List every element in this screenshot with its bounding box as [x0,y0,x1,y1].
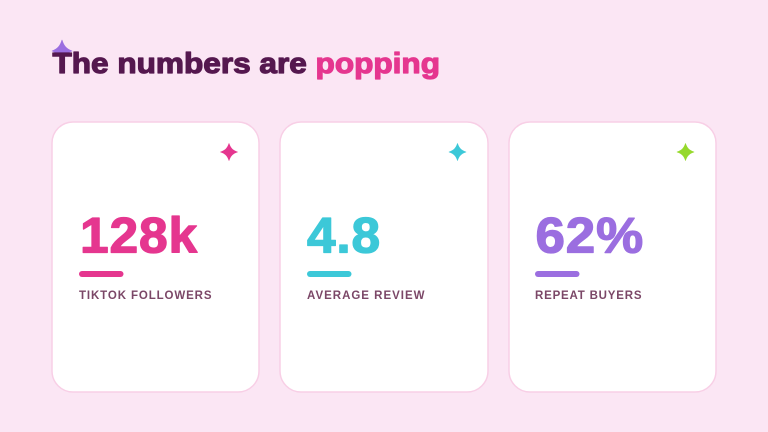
icon: lime sparkle [677,144,694,160]
panel: average review [280,122,488,392]
panel: TikTok followers [52,122,259,392]
stat label: TIKTOK FOLLOWERS [79,290,212,302]
stat value: 4.8 [307,208,381,264]
card background [509,122,716,392]
card background [52,122,259,392]
stat value: 128k [80,208,198,264]
icon: pink sparkle [220,144,238,160]
accent bar [79,271,124,277]
panel: repeat buyers [509,122,716,392]
accent bar [307,271,352,277]
stat label: AVERAGE REVIEW [307,290,425,302]
icon: teal sparkle [449,144,466,160]
card background [280,122,488,392]
stat label: REPEAT BUYERS [535,290,642,302]
stat value: 62% [536,208,644,264]
icon: title sparkle [52,40,72,62]
accent bar [535,271,580,277]
title: The numbers are popping [52,48,440,80]
